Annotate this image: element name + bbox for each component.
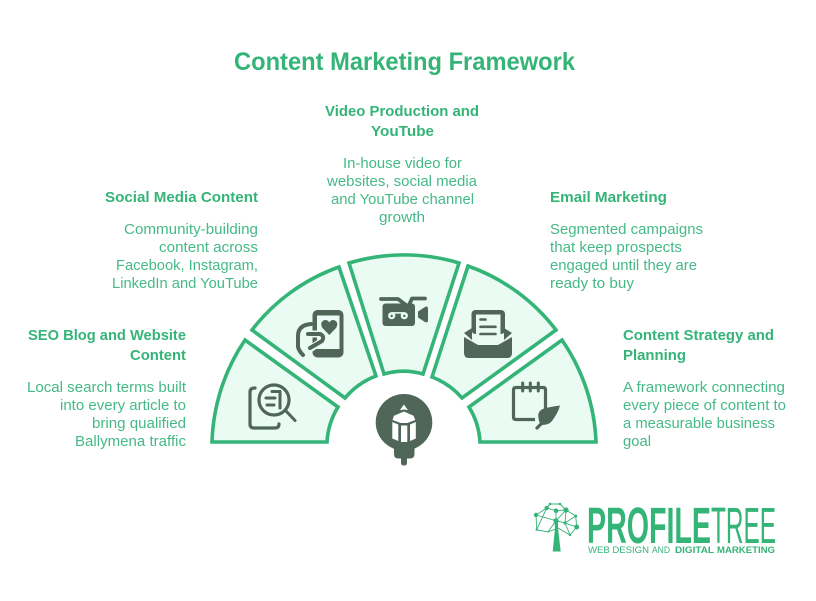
icon: envelope with letter <box>464 310 512 358</box>
panel: SEO Blog and Website Content text: SEO Blog and Website <box>28 327 186 344</box>
panel: Video Production and YouTube text <box>325 103 479 226</box>
panel: Email Marketing text: that keep prospects <box>550 240 682 256</box>
panel: Video Production and YouTube text: and YouTube channel <box>331 192 474 208</box>
panel: Social Media Content text: Social Media Content <box>105 189 258 206</box>
panel: Email Marketing text: engaged until they are <box>550 258 697 274</box>
icon: video camera <box>381 298 428 326</box>
panel: Video Production and YouTube text: Video Production and <box>325 103 479 120</box>
logo tagline: MARKETING <box>717 545 775 556</box>
panel: Video Production and YouTube text: YouTube <box>371 123 434 140</box>
icon: network tree <box>534 503 579 552</box>
segment: video <box>349 255 459 374</box>
logo tagline: DIGITAL <box>675 545 714 556</box>
icon: calendar and quill <box>514 383 560 428</box>
segment: SEO <box>212 340 338 442</box>
panel: Email Marketing text <box>550 189 703 292</box>
panel: Content Strategy and Planning text: a measurable business <box>623 416 775 432</box>
panel: Email Marketing text: Segmented campaigns <box>550 222 703 238</box>
panel: Content Strategy and Planning text: every piece of content to <box>623 398 786 414</box>
panel: Video Production and YouTube text: growth <box>379 210 425 226</box>
panel: SEO Blog and Website Content text: Local search terms built <box>27 380 186 396</box>
icon: search document <box>250 385 295 428</box>
panel: Social Media Content text <box>105 189 258 292</box>
panel: Social Media Content text: LinkedIn and YouTube <box>112 276 258 292</box>
panel: Content Strategy and Planning text: A framework connecting <box>623 380 785 396</box>
panel: SEO Blog and Website Content text: bring qualified <box>92 416 186 432</box>
logo: ProfileTree <box>534 497 776 556</box>
panel: SEO Blog and Website Content text: Content <box>130 347 186 364</box>
logo tagline <box>588 545 775 556</box>
panel: Video Production and YouTube text: websites, social media <box>326 174 478 190</box>
segment: social media <box>252 267 376 398</box>
icon: phone with heart <box>298 310 344 358</box>
panel: Content Strategy and Planning text: goal <box>623 434 651 450</box>
icon: pencil lightbulb <box>376 394 432 466</box>
panel: SEO Blog and Website Content text <box>27 327 186 450</box>
logo tagline: AND <box>652 545 670 556</box>
logo tagline: WEB DESIGN <box>588 545 649 556</box>
panel: Social Media Content text: Community-building <box>124 222 258 238</box>
panel: SEO Blog and Website Content text: into every article to <box>60 398 186 414</box>
panel: Content Strategy and Planning text: Content Strategy and <box>623 327 774 344</box>
segment: strategy <box>469 340 596 442</box>
panel: SEO Blog and Website Content text: Ballymena traffic <box>75 434 186 450</box>
title: Content Marketing Framework <box>234 48 575 76</box>
segment: email <box>432 266 556 398</box>
panel: Content Strategy and Planning text: Planning <box>623 347 686 364</box>
panel: Video Production and YouTube text: In-house video for <box>343 156 462 172</box>
panel: Email Marketing text: ready to buy <box>550 276 635 292</box>
panel: Social Media Content text: Facebook, Instagram, <box>116 258 258 274</box>
panel: Email Marketing text: Email Marketing <box>550 189 667 206</box>
logo wordmark: PROFILE <box>587 497 711 554</box>
panel: Content Strategy and Planning text <box>623 327 786 450</box>
panel: Social Media Content text: content across <box>159 240 258 256</box>
